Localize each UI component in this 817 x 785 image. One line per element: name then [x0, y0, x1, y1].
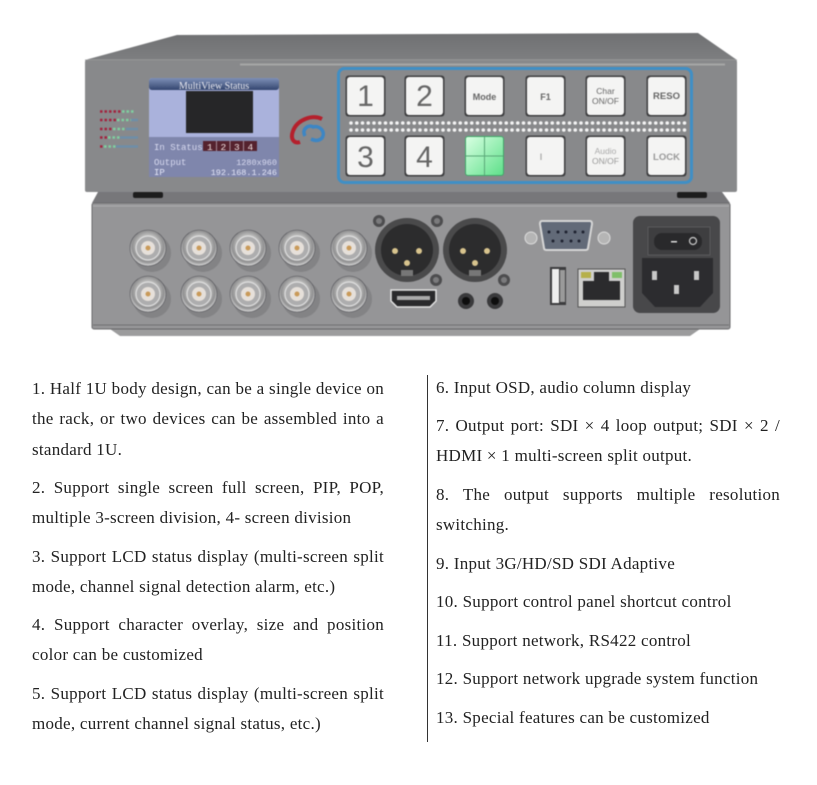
- feature 8: switching.: [436, 515, 509, 534]
- HDMI port: [391, 290, 436, 307]
- front unit: top cover: [85, 33, 737, 60]
- feature 10: 10. Support control panel shortcut control: [436, 592, 732, 611]
- feature 5: [32, 684, 384, 733]
- feature 1: 1. Half 1U body design, can be a single device on: [32, 379, 384, 398]
- DB9 serial port: [525, 221, 610, 250]
- RJ45 network port: [578, 269, 625, 307]
- button: LOCK: [646, 136, 686, 176]
- button: LOCK: LOCK: [653, 152, 680, 163]
- feature 7: 7. Output port: SDI × 4 loop output; SDI × 2 /: [436, 416, 780, 435]
- LCD status screen: Output: [154, 158, 186, 168]
- audio jacks: [458, 293, 503, 309]
- button: Char ON/OF: Char: [596, 86, 615, 96]
- button: Mode: Mode: [473, 92, 496, 102]
- USB port: [550, 267, 566, 305]
- feature 4: [32, 615, 384, 664]
- button: F1: F1: [540, 92, 551, 102]
- button: Audio ON/OF: Audio: [595, 146, 617, 156]
- feature 13: 13. Special features can be customized: [436, 708, 710, 727]
- LCD status screen: 1280x960: [236, 158, 277, 168]
- LED dot rows: [351, 123, 687, 130]
- button: 3: [346, 136, 386, 176]
- button: Mode: [464, 76, 504, 116]
- feature 9: 9. Input 3G/HD/SD SDI Adaptive: [436, 554, 675, 573]
- rear unit: panel: [92, 203, 730, 336]
- button: F1: [526, 76, 566, 116]
- feature 3: 3. Support LCD status display (multi-screen split: [32, 547, 384, 566]
- button: F2: l: [540, 152, 542, 162]
- BNC connectors: [130, 230, 372, 318]
- LCD status screen: MultiView Status: [179, 81, 249, 92]
- button: 3: 3: [357, 141, 374, 174]
- feature 8: 8. The output supports multiple resolution: [436, 485, 780, 504]
- LCD status screen: [149, 78, 279, 178]
- feature 1: standard 1U.: [32, 440, 122, 459]
- right feature list: [436, 378, 780, 727]
- button: 4: [404, 136, 444, 176]
- feature 5: 5. Support LCD status display (multi-screen split: [32, 684, 384, 703]
- feature 12: 12. Support network upgrade system function: [436, 669, 758, 688]
- LCD status screen: In Status: [154, 143, 203, 153]
- feature 6: 6. Input OSD, audio column display: [436, 378, 691, 397]
- LCD status screen: IP: [154, 168, 165, 178]
- feature 11: 11. Support network, RS422 control: [436, 631, 691, 650]
- feature 1: the rack, or two devices can be assembled into a: [32, 409, 384, 428]
- feature 8: [436, 485, 780, 534]
- feature 2: 2. Support single screen full screen, PIP, POP,: [32, 478, 384, 497]
- feature 7: [436, 416, 780, 465]
- feature 1: [32, 379, 384, 459]
- feature 4: 4. Support character overlay, size and position: [32, 615, 384, 634]
- column divider: [427, 375, 428, 742]
- button: 2: [404, 76, 444, 116]
- feature 3: mode, channel signal detection alarm, etc.): [32, 577, 335, 596]
- button: lit green split: [465, 136, 504, 176]
- feature 7: HDMI × 1 multi-screen split output.: [436, 446, 692, 465]
- feature 2: [32, 478, 384, 527]
- LCD status screen: 192.168.1.246: [211, 168, 277, 178]
- rear unit shadow strip and feet: [92, 192, 730, 203]
- feature 4: color can be customized: [32, 645, 203, 664]
- device photo: [84, 32, 738, 337]
- button: F2: [526, 136, 566, 176]
- feature 3: [32, 547, 384, 596]
- LED indicators: [100, 112, 138, 146]
- button: 1: [346, 76, 386, 116]
- feature 2: multiple 3-screen division, 4- screen division: [32, 508, 351, 527]
- left feature list: [32, 379, 384, 733]
- front unit: panel: [85, 60, 737, 192]
- button: Char ON/OF: ON/OF: [592, 96, 619, 106]
- logo: [292, 117, 323, 142]
- feature 5: mode, current channel signal status, etc.): [32, 714, 321, 733]
- power inlet and switch: [633, 216, 720, 313]
- button: 2: 2: [416, 80, 433, 113]
- button: Char ON/OF: [586, 76, 626, 116]
- button: Audio ON/OF: [586, 136, 626, 176]
- control panel outline: [338, 68, 692, 182]
- button: Audio ON/OF: ON/OF: [592, 156, 619, 166]
- button: 4: 4: [416, 141, 433, 174]
- button: RESO: [646, 76, 686, 116]
- XLR connectors: [373, 215, 510, 286]
- button: 1: 1: [357, 80, 374, 113]
- button: RESO: RESO: [653, 91, 680, 102]
- LCD status screen: 1234: [207, 142, 254, 153]
